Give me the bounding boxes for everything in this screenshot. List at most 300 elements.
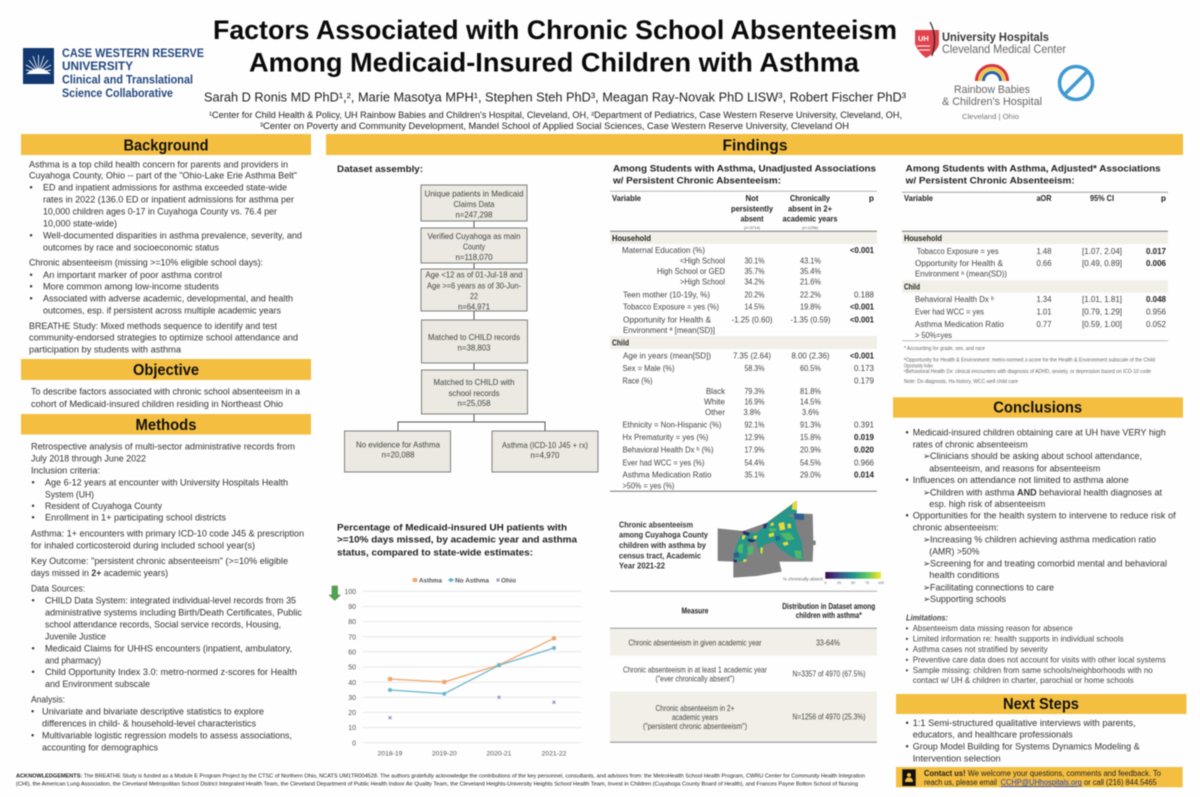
row: persistent chronic absenteeism (643, 703, 866, 731)
row: persistent chronic absenteeism: ("persistent chronic absenteeism") (643, 721, 747, 731)
text block: background: • (30, 293, 33, 303)
y axis labels: 90 (348, 604, 356, 611)
table group: child: 15.8% (800, 432, 821, 442)
y axis labels: 70 (348, 634, 356, 642)
table group: child: Child (612, 337, 629, 347)
text block: methods: Enrollment in 1+ participating school districts (45, 512, 226, 523)
text block: methods: Data Sources: (31, 583, 85, 594)
text block: conclusions: ➢ (923, 582, 931, 592)
text block: conclusions: Opportunities for the health system to intervene to reduce risk of (913, 510, 1176, 521)
table group: child: Sex = Male (%) (622, 363, 675, 373)
table group: child: 60.5% (800, 363, 821, 373)
text block: next steps: • (906, 742, 909, 752)
table group: child: >50% = yes (%) (622, 480, 675, 490)
adjusted group: child: Ever had WCC = yes (915, 306, 984, 316)
text block: background: ED and inpatient admissions for asthma exceeded state-wide (43, 181, 287, 192)
box: age criteria: Age >=6 years as of 30-Jun- (427, 281, 521, 291)
adjusted group: child: Behavioral Health Dx ᵇ (915, 294, 994, 304)
icon: blue prohibition circle (1060, 66, 1092, 100)
text block: conclusions: Medicaid-insured children obtaining care at UH have VERY high (913, 427, 1166, 438)
table group: household: <0.001 (850, 245, 874, 255)
map legend: 100 (878, 581, 884, 585)
text block: background: Chronic absenteeism (missing >=10% eligible school days): (29, 257, 263, 268)
legend: No Asthma (455, 577, 490, 584)
text block: methods: Resident of Cuyahoga County (45, 500, 162, 511)
logo: University Hospitals: Cleveland Medical Center (942, 42, 1066, 56)
text block: objective (31, 386, 301, 409)
box: verified Cuyahoga: n=118,070 (456, 252, 493, 262)
y axis labels (344, 589, 356, 747)
text block: next steps: Group Model Building for Systems Dynamics Modeling & (913, 741, 1140, 752)
text block: background: BREATHE Study: Mixed methods sequence to identify and test (29, 320, 277, 331)
logo: Case Western Reserve University: CASE WESTERN RESERVE (62, 46, 204, 60)
text block: conclusions: Screening for and treating comorbid mental and behavioral (930, 557, 1167, 568)
text block: methods: • (32, 667, 35, 677)
text block: methods: Juvenile Justice (45, 630, 106, 641)
y axis labels: 10 (348, 725, 356, 732)
table group: child: 20.9% (800, 445, 821, 455)
x axis labels (378, 750, 567, 758)
text block: objective: cohort of Medicaid-insured children residing in Northeast Ohio (31, 398, 283, 409)
y axis labels: 0 (352, 740, 356, 747)
table group: household: 30.1% (744, 256, 765, 266)
table group: child: 81.8% (800, 386, 821, 396)
adjusted group: household (904, 233, 1166, 279)
y axis labels: 60 (348, 650, 356, 656)
logo: Rainbow Babies & Children's Hospital: Cleveland | Ohio (962, 114, 1019, 121)
adjusted group: child: [0.79, 1.29] (1082, 306, 1122, 316)
title (213, 15, 897, 78)
panel: findings (326, 134, 1183, 758)
text block: methods: Multivariable logistic regression models to assess associations, (42, 730, 292, 741)
text block: background: Associated with adverse academic, developmental, and health (43, 292, 293, 303)
table group: household: -1.35 (0.59) (790, 314, 831, 324)
text block: background: Cuyahoga County, Ohio -- part of the "Ohio-Lake Erie Asthma Belt" (29, 170, 297, 181)
distribution table header (682, 601, 875, 620)
y axis labels: 50 (348, 665, 356, 672)
text block: methods: school attendance records, Social service records, Housing, (45, 618, 281, 629)
text block: conclusions: Supporting schools (930, 593, 1006, 604)
box: age criteria: n=64,971 (458, 302, 490, 312)
table group: household: 34.2% (744, 277, 765, 287)
table group: child: 92.1% (744, 420, 765, 430)
map legend: % chronically absent (783, 576, 824, 582)
table header: Variable (612, 193, 641, 203)
adjusted table header: aOR (1036, 193, 1052, 203)
box: age criteria: 22 (470, 291, 478, 301)
contact text (924, 769, 1162, 787)
table group: child: 58.3% (744, 363, 765, 373)
logo: University Hospitals: University Hospitals (942, 30, 1049, 44)
contact text: reach us, please email (924, 778, 997, 787)
table group: household: Household (612, 233, 651, 243)
heading: methods: Methods (136, 417, 196, 434)
y axis labels: 30 (348, 695, 356, 702)
row: ever chronically absent: Chronic absenteeism in at least 1 academic year (623, 664, 767, 674)
adjusted group: household: [0.49, 0.89] (1082, 258, 1122, 268)
table group: child: 12.9% (744, 432, 765, 442)
text block: conclusions: Clinicians should be asking about school attendance, (930, 450, 1142, 461)
text block: methods: administrative systems including Birth/Death Certificates, Public (45, 607, 302, 618)
text block: background: • (30, 182, 33, 192)
panel: conclusions (893, 397, 1183, 685)
table group: child: Hx Prematurity = yes (%) (622, 432, 709, 442)
text block: conclusions: ➢ (923, 535, 931, 545)
table group: household: High School or GED (657, 266, 725, 276)
box: unique patients: Claims Data (454, 199, 495, 209)
text block: background: Asthma is a top child health concern for parents and providers in (29, 158, 288, 169)
text block: conclusions: esp. high risk of absenteeism (929, 498, 1045, 509)
text block: conclusions: Facilitating connections to care (930, 581, 1054, 592)
x axis labels: 2020-21 (487, 750, 512, 758)
text block: limitations: Limited information re: health supports in individual schools (913, 633, 1124, 643)
map caption: Chronic absenteeism (619, 519, 693, 529)
distribution table header: children with asthma* (796, 610, 862, 620)
text block: next steps (906, 717, 1140, 763)
text block: methods: CHILD Data System: integrated individual-level records from 35 (45, 595, 296, 606)
box: age criteria: Age <12 as of 01-Jul-18 and (426, 270, 523, 280)
table group: household: <High School (680, 256, 725, 266)
text block: background: participation by students with asthma (29, 344, 182, 355)
table header: persistently (731, 203, 773, 213)
adjusted group: child: 0.956 (1146, 306, 1166, 316)
callout: contact us (896, 767, 1183, 787)
row: ever chronically absent: ("ever chronically absent") (656, 673, 735, 683)
table header: Not (746, 193, 759, 203)
adjusted table header: 95% CI (1090, 193, 1114, 203)
adjusted group: household: [1.07, 2.04] (1082, 246, 1122, 256)
affiliations: ³Center on Poverty and Community Development, Mandel School of Applied Social Sciences, Case Western Reserve University, Cleveland OH (260, 121, 849, 131)
heading: background (21, 134, 311, 155)
chart heading (337, 522, 578, 557)
text block: limitations: Sample missing: children from same schools/neighborhoods with no (913, 665, 1153, 675)
text block: conclusions: rates of chronic absenteeism (913, 438, 1028, 449)
logo: Case Western Reserve University: UNIVERSITY (62, 59, 133, 73)
series: asthma (388, 636, 556, 684)
table group: child: Other (705, 407, 725, 417)
text block: methods: • (32, 513, 35, 523)
adjusted group: household: 0.017 (1146, 246, 1166, 256)
table header: academic years (782, 213, 838, 223)
adjusted group: child: 0.048 (1146, 294, 1166, 304)
text block: limitations: • (906, 654, 908, 664)
adjusted group: child: [0.59, 1.00] (1082, 319, 1122, 329)
logo: University Hospitals: UH (918, 34, 929, 43)
table group: child: Black (706, 386, 726, 396)
adjusted group: household: 0.66 (1036, 258, 1052, 268)
heading: objective: Objective (133, 362, 199, 379)
text block: conclusions: chronic absenteeism: (913, 522, 999, 533)
box: verified Cuyahoga: County (463, 242, 486, 252)
adjusted group: child: [1.01, 1.81] (1082, 294, 1122, 304)
adjusted table heading: Among Students with Asthma, Adjusted* Associations (906, 162, 1161, 173)
logo: Case Western Reserve University (23, 46, 204, 100)
y axis labels: 80 (348, 619, 356, 626)
logo: University Hospitals (915, 22, 1066, 58)
text block: conclusions: ➢ (923, 558, 931, 568)
text block: background: community-endorsed strategies to optimize school attendance and (29, 332, 298, 343)
table group: child: 8.00 (2.36) (792, 350, 830, 360)
heading: objective (21, 359, 311, 380)
text block: methods: • (31, 707, 34, 717)
text block: next steps: educators, and healthcare professionals (913, 729, 1073, 740)
box: no evidence for asthma (344, 431, 450, 472)
text block: methods: • (31, 731, 34, 741)
row: given academic year: Chronic absenteeism in given academic year (628, 637, 762, 647)
text block: background: 10,000 state-wide) (43, 218, 117, 229)
text block: conclusions: Increasing % children achieving asthma medication ratio (930, 534, 1156, 545)
table group: household (612, 233, 874, 335)
logo: Rainbow Babies & Children's Hospital: Rainbow Babies (954, 84, 1030, 96)
table: distribution of chronic absenteeism (610, 591, 877, 742)
series: no asthma (388, 646, 556, 696)
text block: limitations: • (906, 665, 908, 675)
adjusted group: household: Opportunity for Health & (915, 258, 1003, 268)
box: asthma: n=4,970 (530, 450, 560, 460)
logo: Rainbow Babies & Children's Hospital (942, 66, 1042, 121)
table group: household: 14.5% (744, 302, 765, 312)
poster header (23, 15, 1092, 131)
adjusted table header: p (1161, 193, 1166, 203)
logo: Case Western Reserve University: Science Collaborative (62, 86, 173, 100)
adjusted group: child: 0.77 (1036, 319, 1052, 329)
text block: conclusions: absenteeism, and reasons for absenteeism (929, 462, 1100, 473)
text block: limitations: • (906, 633, 908, 643)
title: Factors Associated with Chronic School Absenteeism (213, 15, 897, 45)
text block: conclusions: • (906, 511, 909, 521)
chart heading: status, compared to state-wide estimates: (337, 546, 533, 557)
heading: next steps (896, 694, 1186, 714)
table group: child: 35.1% (744, 470, 765, 480)
text block: conclusions: • (906, 428, 909, 438)
panel: background (21, 134, 311, 355)
table: unadjusted associations (610, 162, 877, 491)
contact text: Contact us! We welcome your questions, comments and feedback. To (924, 769, 1162, 778)
text block: conclusions: (AMR) >50% (929, 546, 979, 557)
heading: findings: Findings (722, 138, 788, 154)
text block: next steps: 1:1 Semi-structured qualitative interviews with parents, (913, 717, 1136, 728)
text block: next steps: Intervention selection (913, 752, 1001, 763)
table group: child: 7.35 (2.64) (733, 350, 771, 360)
adjusted group: child: > 50%=yes (915, 330, 952, 340)
row: persistent chronic absenteeism: Chronic absenteeism in 2+ (656, 703, 735, 713)
text block: conclusions: • (906, 475, 909, 485)
flowchart heading: Dataset assembly: (337, 163, 423, 174)
panel: objective (21, 359, 311, 409)
contact text: CCHP@UHhospitals.org (1001, 778, 1082, 787)
text block: methods: differences in child- & household-level characteristics (42, 717, 256, 728)
adjusted table heading: w/ Persistent Chronic Absenteeism: (905, 174, 1075, 185)
map legend: 50 (851, 581, 855, 585)
table group: household: Environment ª [mean(SD)] (623, 325, 715, 335)
distribution table header: Distribution in Dataset among (782, 601, 875, 611)
map legend: 0 (824, 581, 826, 585)
adjusted table header: Variable (904, 193, 933, 203)
table group: child: 0.019 (854, 432, 874, 442)
table group: household: 0.188 (854, 289, 874, 299)
text block: methods (31, 441, 304, 752)
adjusted group: household: Household (904, 233, 942, 243)
table group: household: 35.4% (800, 266, 821, 276)
text block: methods: • (32, 501, 35, 511)
table group: household: 22.2% (800, 289, 821, 299)
y axis labels: 20 (348, 710, 356, 717)
acknowledgements: ACKNOWLEDGEMENTS: The BREATHE Study is funded as a Module E Program Project by the CTSC of Northern Ohio, NCATS UM1TR004528. The authors gratefully acknowledge the contributions of the key personnel, consultants, and advisors from: the MetroHealth School Health Program, CWRU Center for Community Health Integration (16, 774, 865, 780)
text block: limitations: Preventive care data does not account for visits with other local systems (913, 654, 1166, 664)
table group: household: <0.001 (850, 302, 874, 312)
table group: child: 0.179 (854, 375, 874, 385)
table group: child: Ever had WCC = yes (%) (622, 457, 705, 467)
y axis labels: 100 (344, 589, 356, 596)
text block: background: rates in 2022 (136.0 ED or inpatient admissions for asthma per (43, 193, 294, 204)
text block: methods: Asthma: 1+ encounters with primary ICD-10 code J45 & prescription (31, 528, 304, 539)
row: persistent chronic absenteeism: N=1256 of 4970 (25.3%) (792, 712, 866, 722)
table footnotes: ᵇBehavioral Health Dx: clinical encounters with diagnosis of ADHD, anxiety, or depression based on ICD-10 code (904, 369, 1151, 375)
map caption: among Cuyahoga County (619, 530, 708, 540)
table footnotes: Opportunity Index (904, 364, 933, 370)
text block: methods: System (UH) (45, 488, 94, 499)
legend: Ohio (501, 577, 516, 584)
logo: Case Western Reserve University: Clinical and Translational (62, 72, 193, 86)
table group: child: <0.001 (850, 350, 874, 360)
text block: limitations: Absenteeism data missing reason for absence (913, 623, 1073, 633)
box: matched to CHILD: n=38,803 (458, 342, 491, 352)
table group: child: 16.9% (744, 396, 765, 406)
text block: methods: for inhaled corticosteroid during included school year(s) (31, 540, 255, 551)
adjusted group: household: 0.006 (1146, 258, 1166, 268)
table group: child: 0.014 (854, 470, 874, 480)
x axis labels: 2021-22 (542, 750, 567, 758)
box: matched with school records: n=25,058 (458, 398, 491, 408)
heading: findings (326, 134, 1183, 155)
text block: conclusions: ➢ (923, 487, 931, 497)
distribution table header: Measure (682, 606, 709, 616)
text block: methods: • (32, 477, 35, 487)
text block: methods: accounting for demographics (42, 741, 158, 752)
table group: household: -1.25 (0.60) (732, 314, 773, 324)
text block: limitations: contact w/ UH & children in charter, parochial or home schools (913, 675, 1134, 685)
icon: contact book (902, 769, 916, 786)
text block: methods: Retrospective analysis of multi-sector administrative records from (31, 441, 295, 452)
adjusted group: child: 1.01 (1036, 306, 1052, 316)
table group: child: 54.4% (744, 457, 765, 467)
flowchart: dataset assembly (337, 163, 598, 472)
table group: household: Tobacco Exposure = yes (%) (623, 302, 719, 312)
text block: methods: days missed in 2+ academic years) (31, 567, 168, 578)
text block: methods: Child Opportunity Index 3.0: metro-normed z-scores for Health (45, 666, 297, 677)
box: verified Cuyahoga (421, 228, 527, 263)
box: asthma: Asthma (ICD-10 J45 + rx) (502, 440, 588, 450)
table header: Chronically (790, 193, 830, 203)
adjusted group: household: 1.48 (1036, 246, 1052, 256)
box: unique patients (421, 185, 527, 221)
table group: child: 0.391 (854, 420, 874, 430)
adjusted group: child: 0.052 (1146, 319, 1166, 329)
table footnotes: ªOpportunity for Health & Environment: metro-normed z-score for the Health & Environment subscale of the Child (904, 358, 1155, 364)
table group: child: 3.8% (744, 407, 761, 417)
row: ever chronically absent (623, 664, 866, 683)
table footnotes (904, 346, 1155, 385)
x axis labels: 2018-19 (378, 750, 403, 758)
table group: child: 29.0% (800, 470, 821, 480)
text block: methods: and Environment subscale (45, 678, 150, 689)
text block: conclusions: health conditions (929, 569, 1000, 580)
row: persistent chronic absenteeism: academic years (672, 712, 718, 722)
table group: household: Teen mother (10-19y, %) (623, 289, 710, 299)
box: age criteria (421, 269, 527, 312)
contact text: or call (216) 844.5465 (1084, 778, 1157, 787)
table: adjusted associations (902, 162, 1168, 385)
text block: next steps: • (906, 718, 909, 728)
table group: child: White (704, 396, 725, 406)
text block: limitations: • (906, 623, 908, 633)
map legend: 25 (837, 581, 841, 585)
y axis labels: 40 (348, 680, 356, 687)
text block: limitations (906, 612, 1166, 685)
table heading (612, 162, 876, 185)
table group: child: 17.9% (744, 445, 765, 455)
table header: (n=1256) (802, 225, 819, 230)
table group: household: 43.1% (800, 256, 821, 266)
text block: background: • (30, 230, 33, 240)
table group: child: Race (%) (622, 375, 653, 385)
table heading: Among Students with Asthma, Unadjusted Associations (613, 162, 876, 173)
table footnotes: Note: Dx-diagnosis, Hx-history, WCC-well child care (904, 379, 1018, 385)
table group: household: 21.6% (800, 277, 821, 287)
box: matched to CHILD: Matched to CHILD records (428, 332, 520, 342)
text block: conclusions: ➢ (923, 451, 931, 461)
text block: methods: July 2018 through June 2022 (31, 452, 146, 463)
text block: background: An important marker of poor asthma control (43, 269, 222, 280)
legend (412, 577, 516, 584)
box: no evidence for asthma: n=20,088 (382, 450, 415, 460)
table group: child: 14.5% (800, 396, 821, 406)
table header: p (869, 193, 874, 203)
acknowledgements: (CHI), the American Lung Association, the Cleveland Metropolitan School District Integrated Health Team, the Cleveland Department of Public Health Indoor Air Quality Team, the Cleveland Heights-University Heights School Health Team, Invest in Children (Cuyahoga County Board of Health), and Frances Payne Bolton School of Nursing (16, 782, 858, 788)
map caption: Year 2021-22 (619, 561, 665, 571)
heading: conclusions (893, 397, 1183, 418)
affiliations (209, 110, 902, 131)
table group: household: 35.7% (744, 266, 765, 276)
table group: household: 20.2% (744, 289, 765, 299)
table group: child: 91.3% (800, 420, 821, 430)
text block: methods: Analysis: (31, 694, 65, 705)
table heading: w/ Persistent Chronic Absenteeism: (612, 174, 781, 185)
table group: child: Behavioral Health Dx ᵇ (%) (622, 445, 714, 455)
chart heading: >=10% days missed, by academic year and asthma (337, 534, 578, 545)
text block: methods: Key Outcome: "persistent chronic absenteeism" (>=10% eligible (31, 555, 288, 566)
text block: methods: Age 6-12 years at encounter with University Hospitals Health (45, 476, 288, 487)
chart heading: Percentage of Medicaid-insured UH patients with (337, 522, 567, 533)
adjusted group: household: Tobacco Exposure = yes (917, 246, 999, 256)
text block: background: Well-documented disparities in asthma prevalence, severity, and (43, 229, 302, 240)
table group: child: 54.5% (800, 457, 821, 467)
text block: methods: and pharmacy) (45, 654, 101, 665)
map legend: 75 (865, 581, 869, 585)
text block: background: • (30, 270, 33, 280)
heading: background: Background (124, 138, 208, 154)
map caption: census tract, Academic (619, 550, 701, 560)
text block: background: 10,000 children ages 0-17 in Cuyahoga County vs. 76.4 per (43, 206, 277, 217)
text block: methods: Inclusion criteria: (31, 465, 100, 476)
text block: methods: • (32, 644, 35, 654)
panel: methods (21, 414, 311, 752)
table group: child: 0.966 (854, 457, 874, 467)
icon: green down arrow (329, 586, 340, 600)
table group: household: Maternal Education (%) (622, 245, 705, 255)
table footnotes: * Accounting for grade, sex, and race (904, 346, 985, 352)
table header: absent in 2+ (788, 203, 832, 213)
